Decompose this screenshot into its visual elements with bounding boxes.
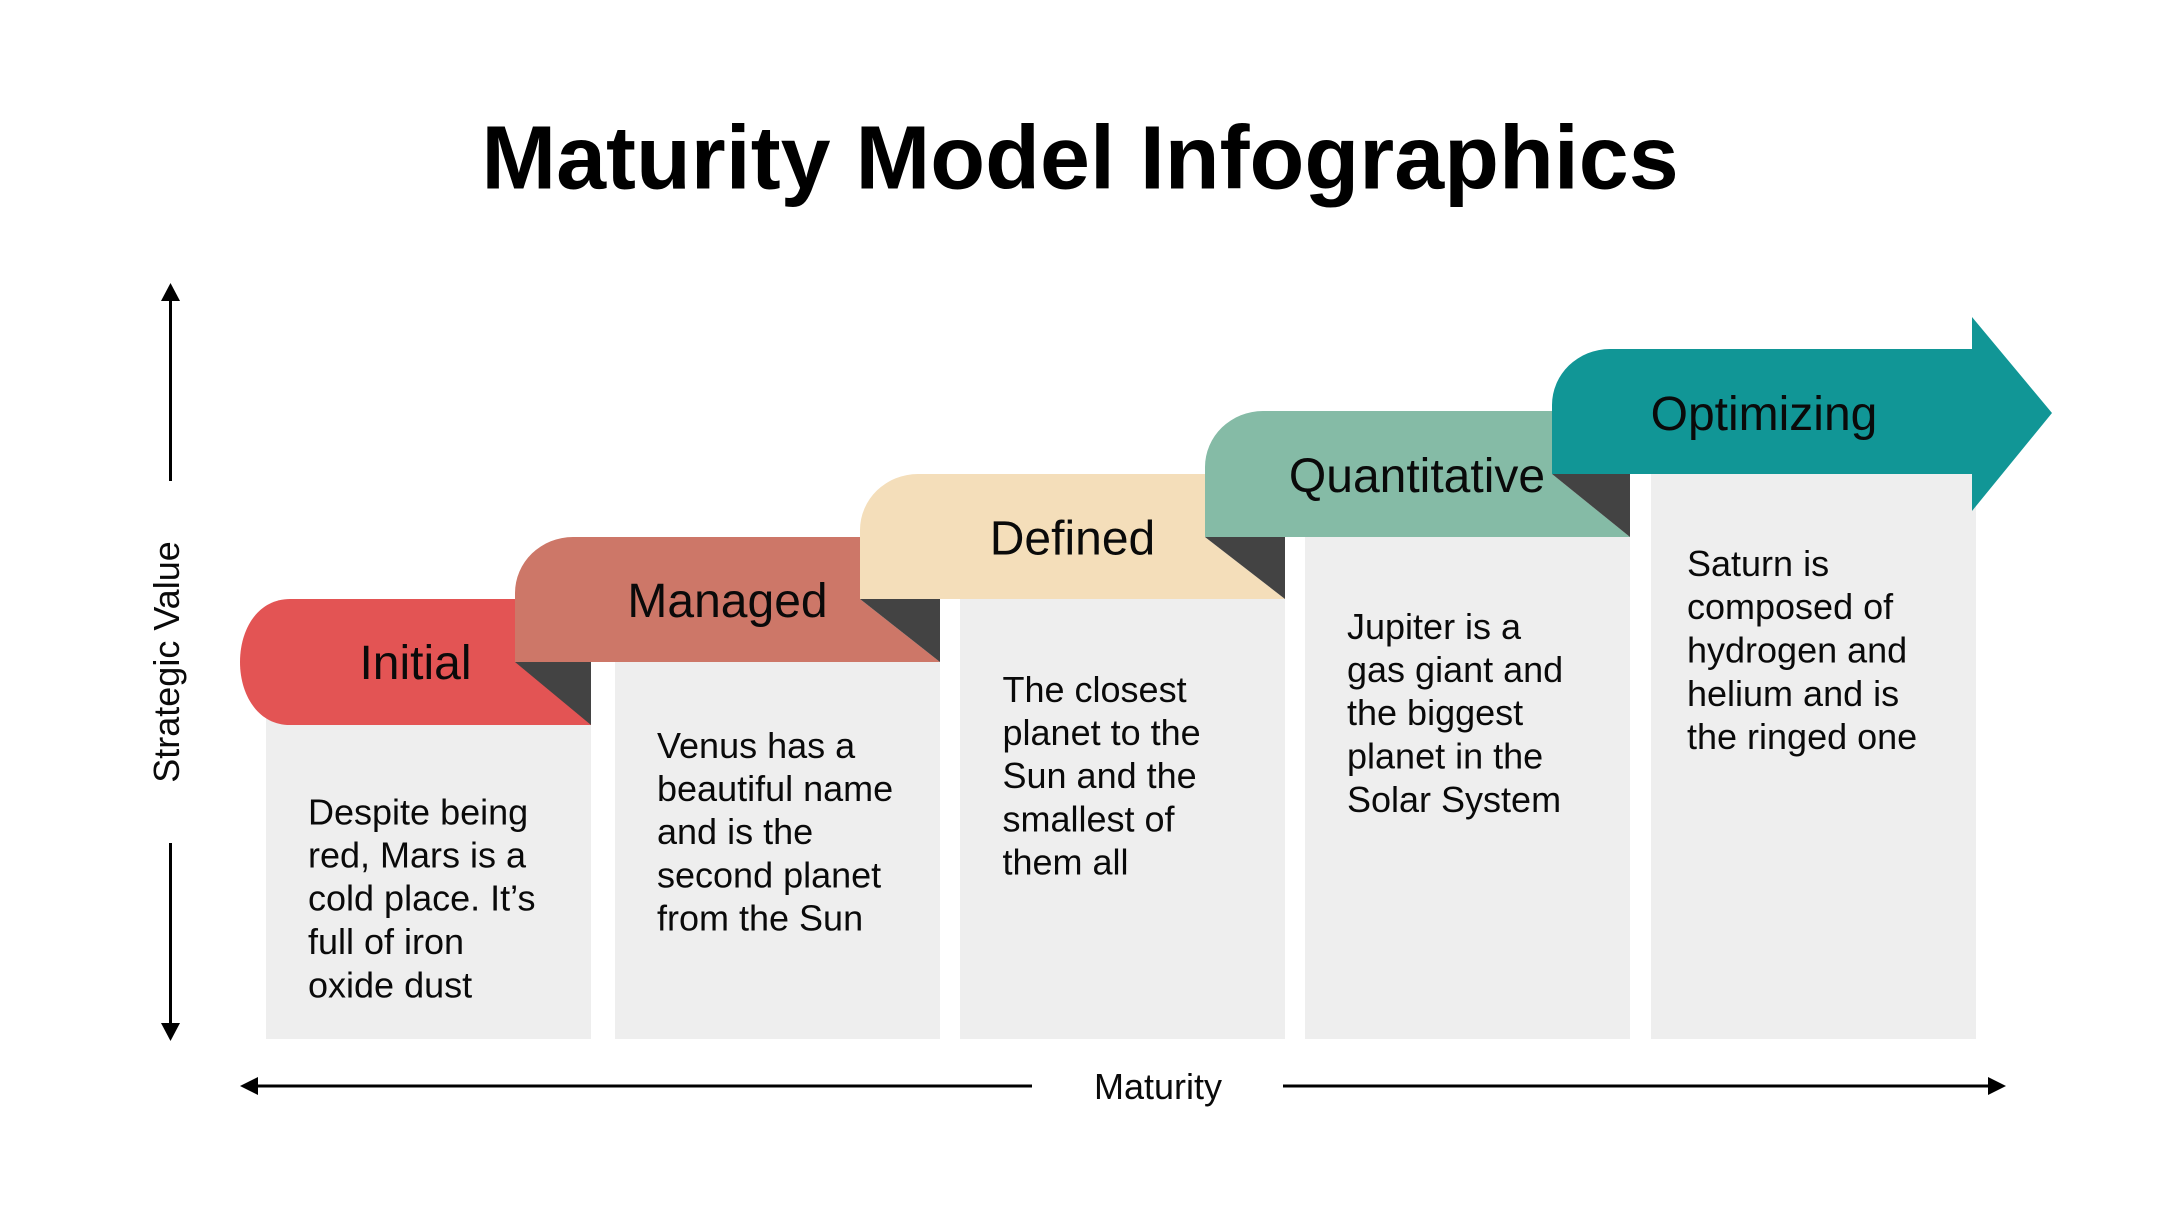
arrow tab: optimizing: [1552, 317, 2052, 511]
label: optimizing: Optimizing: [1651, 388, 1877, 441]
text: managed description: second planet: [657, 854, 881, 896]
text: optimizing description: hydrogen and: [1687, 630, 1907, 670]
panel: managed description: [615, 650, 940, 1039]
text: quantitative description: gas giant and: [1347, 649, 1563, 690]
panel: quantitative description: [1305, 530, 1630, 1039]
text: initial description: Despite being: [308, 792, 528, 832]
text: optimizing description: the ringed one: [1687, 716, 1917, 757]
text: defined description: smallest of: [1002, 798, 1176, 840]
text: managed description: beautiful name: [657, 768, 893, 809]
fold: defined: [1205, 537, 1285, 599]
text: quantitative description: planet in the: [1347, 736, 1543, 776]
axis label: strategic value: Strategic Value: [146, 541, 187, 783]
text: defined description: The closest: [1002, 669, 1187, 710]
text: optimizing description: composed of: [1687, 586, 1894, 627]
label: quantitative: Quantitative: [1289, 450, 1545, 503]
arrow: right: [1283, 1077, 2006, 1095]
tab: initial: [240, 599, 591, 725]
step 3: defined: [860, 474, 1285, 1039]
arrow: down: [161, 843, 180, 1041]
panel: defined description: [960, 590, 1285, 1039]
text: optimizing description: Saturn is: [1687, 543, 1829, 584]
step 5: optimizing: [1552, 317, 2052, 1039]
axis label: maturity: Maturity: [1094, 1066, 1222, 1107]
arrow: up: [161, 283, 180, 481]
tab: managed: [515, 537, 940, 662]
text: quantitative description: Jupiter is a: [1347, 606, 1522, 647]
step 4: quantitative: [1205, 411, 1630, 1039]
text: initial description: cold place. It’s: [308, 878, 535, 918]
horizontal axis: maturity: [240, 1066, 2006, 1107]
text: quantitative description: the biggest: [1347, 692, 1523, 733]
text: defined description: them all: [1002, 842, 1129, 882]
text: defined description: Sun and the: [1002, 755, 1197, 796]
text: optimizing description: helium and is: [1687, 673, 1899, 714]
panel: optimizing description: [1651, 470, 1976, 1039]
fold: initial: [515, 662, 591, 725]
tab: quantitative: [1205, 411, 1630, 537]
text: managed description: Venus has a: [657, 725, 856, 766]
text: quantitative description: Solar System: [1347, 779, 1561, 820]
fold: managed: [860, 599, 940, 662]
label: defined: Defined: [990, 512, 1155, 566]
step 2: managed: [515, 537, 940, 1039]
arrow: left: [240, 1077, 1032, 1095]
title: Maturity Model Infographics: [481, 108, 1679, 208]
text: managed description: from the Sun: [657, 898, 863, 938]
label: initial: Initial: [359, 637, 472, 690]
text: initial description: full of iron: [308, 921, 464, 962]
text: initial description: oxide dust: [308, 964, 472, 1006]
fold: quantitative: [1552, 474, 1630, 537]
text: defined description: planet to the: [1002, 712, 1201, 753]
panel: initial description: [266, 700, 591, 1039]
step 1: initial: [240, 599, 591, 1039]
tab: defined: [860, 474, 1285, 599]
label: managed: Managed: [627, 575, 828, 628]
vertical axis: strategic value: [146, 283, 187, 1041]
text: managed description: and is the: [657, 811, 813, 852]
text: initial description: red, Mars is a: [308, 834, 527, 876]
